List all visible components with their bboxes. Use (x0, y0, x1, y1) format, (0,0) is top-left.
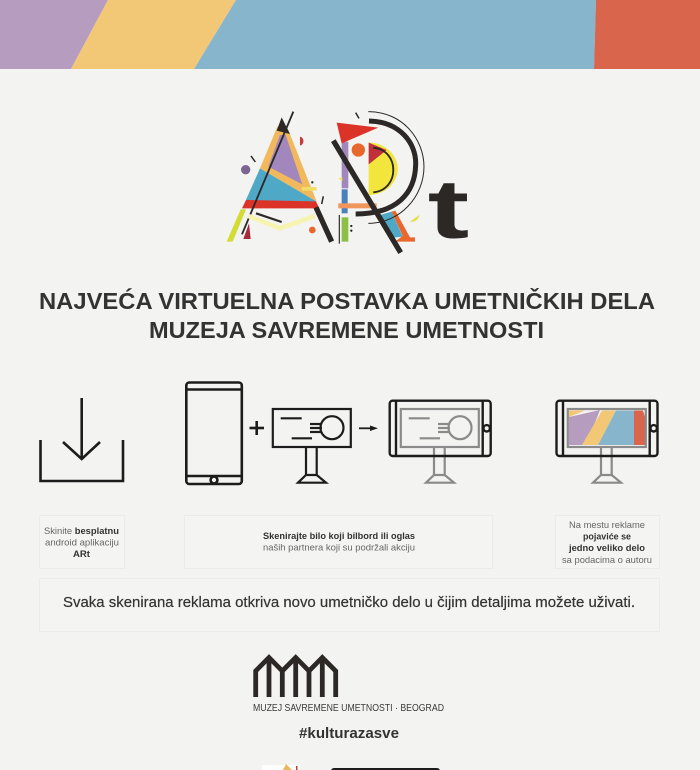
icon: phone (186, 382, 242, 484)
store button (331, 768, 440, 770)
main heading: MUZEJA SAVREMENE UMETNOSTI (149, 317, 544, 343)
panel: step 1 text: android aplikaciju (45, 538, 119, 548)
letter A artwork (227, 112, 332, 242)
panel: step 2 text (184, 516, 492, 568)
panel: step 1 text: ARt (73, 549, 90, 559)
panel: step 3 text: pojaviće se (583, 532, 631, 542)
museum name: MUZEJ SAVREMENE UMETNOSTI · BEOGRAD (253, 703, 444, 714)
panel: step 2 text: naših partnera koji su podržali akciju (263, 542, 415, 552)
icon: plus (250, 421, 264, 435)
hashtag: #kulturazasve (299, 726, 399, 742)
panel: step 3 text: sa podacima o autoru (562, 555, 652, 565)
icon: billboard (273, 409, 351, 483)
main heading: NAJVEĆA VIRTUELNA POSTAVKA UMETNIČKIH DELA (39, 287, 655, 314)
main heading (39, 287, 655, 343)
panel: step 3 text: Na mestu reklame (569, 520, 645, 530)
icon: download (40, 398, 123, 481)
icon: museum houses (256, 658, 336, 697)
panel: summary text (40, 578, 660, 632)
museum logo (253, 658, 444, 714)
panel: step 3 text: jedno veliko delo (568, 543, 645, 553)
panel: step 1 text (40, 516, 124, 568)
letter R artwork (333, 112, 424, 253)
icon: phone scanning billboard (390, 401, 491, 483)
app icon (262, 764, 300, 770)
icon: arrow (359, 426, 378, 431)
panel: step 3 text (556, 516, 660, 568)
panel: step 1 text: Skinite besplatnu (44, 526, 119, 536)
panel: step 2 text: Skenirajte bilo koji bilbord ili oglas (263, 531, 415, 541)
ARt logo (227, 112, 469, 256)
letter t: t (428, 163, 469, 256)
top colour band (0, 0, 700, 69)
panel: summary text: Svaka skenirana reklama otkriva novo umetničko delo u čijim detaljima možete uživati. (63, 594, 635, 611)
icon: phone showing artwork (556, 401, 658, 483)
